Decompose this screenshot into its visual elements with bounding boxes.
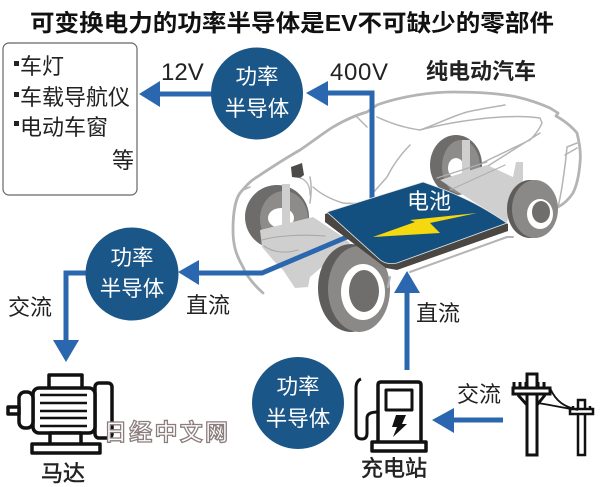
battery label: 电池 [407,189,451,214]
semiconductor circle: motor: 功率 [110,246,154,270]
label: DC to motor side: 直流 [186,293,230,318]
label: pure electric vehicle: 纯电动汽车 [426,59,536,84]
car body outline [233,92,580,293]
icon: charging station [356,379,426,451]
front far wheel [245,184,309,249]
semiconductor circle: top [211,48,303,140]
arrow: battery to 400V semiconductor [306,81,372,200]
semiconductor circle: motor: 半导体 [100,277,164,301]
panel: 12V loads list [3,43,137,195]
rear near wheel [507,180,558,238]
arrow: grid to charging station [432,408,503,433]
car illustration [233,92,580,332]
semiconductor circle: charger [252,357,344,449]
label: 12V: 12V [161,59,204,86]
semiconductor circle: charger: 功率 [276,375,320,399]
label: motor: 马达 [41,461,85,486]
semiconductor circle: motor [86,228,178,320]
car windows and body lines [243,105,577,207]
front chassis [260,217,350,288]
arrow: semiconductor to 12V list [139,81,212,107]
label: AC to motor: 交流 [8,295,52,320]
arrow: battery to motor semiconductor [178,237,347,285]
label: DC from charger: 直流 [416,301,460,326]
front near wheel [318,244,390,332]
rear chassis [440,162,523,223]
battery [325,182,508,270]
rear far wheel [430,135,482,195]
label: AC from grid: 交流 [457,382,501,407]
icon: motor [8,375,112,453]
list item: navigation: 车载导航仪 [20,85,130,110]
arrow: semiconductor to motor [53,273,86,362]
list item: power windows: 电动车窗 [20,115,108,140]
watermark: 日经中文网 [104,419,228,445]
lower body line [388,237,513,287]
arrow: charging station to battery [394,271,420,370]
icon: utility poles [513,374,593,455]
icon: lightning bolt [373,213,477,237]
semiconductor circle: top: 半导体 [225,97,289,121]
label: 400V: 400V [330,59,388,86]
component on firewall [291,163,304,178]
list item: etc: 等 [112,148,134,173]
list item: lights: 车灯 [20,54,64,79]
semiconductor circle: charger: 半导体 [266,407,330,431]
semiconductor circle: top: 功率 [235,65,279,89]
label: charging station: 充电站 [361,456,427,481]
title: 可变换电力的功率半导体是EV不可缺少的零部件 [30,9,554,36]
